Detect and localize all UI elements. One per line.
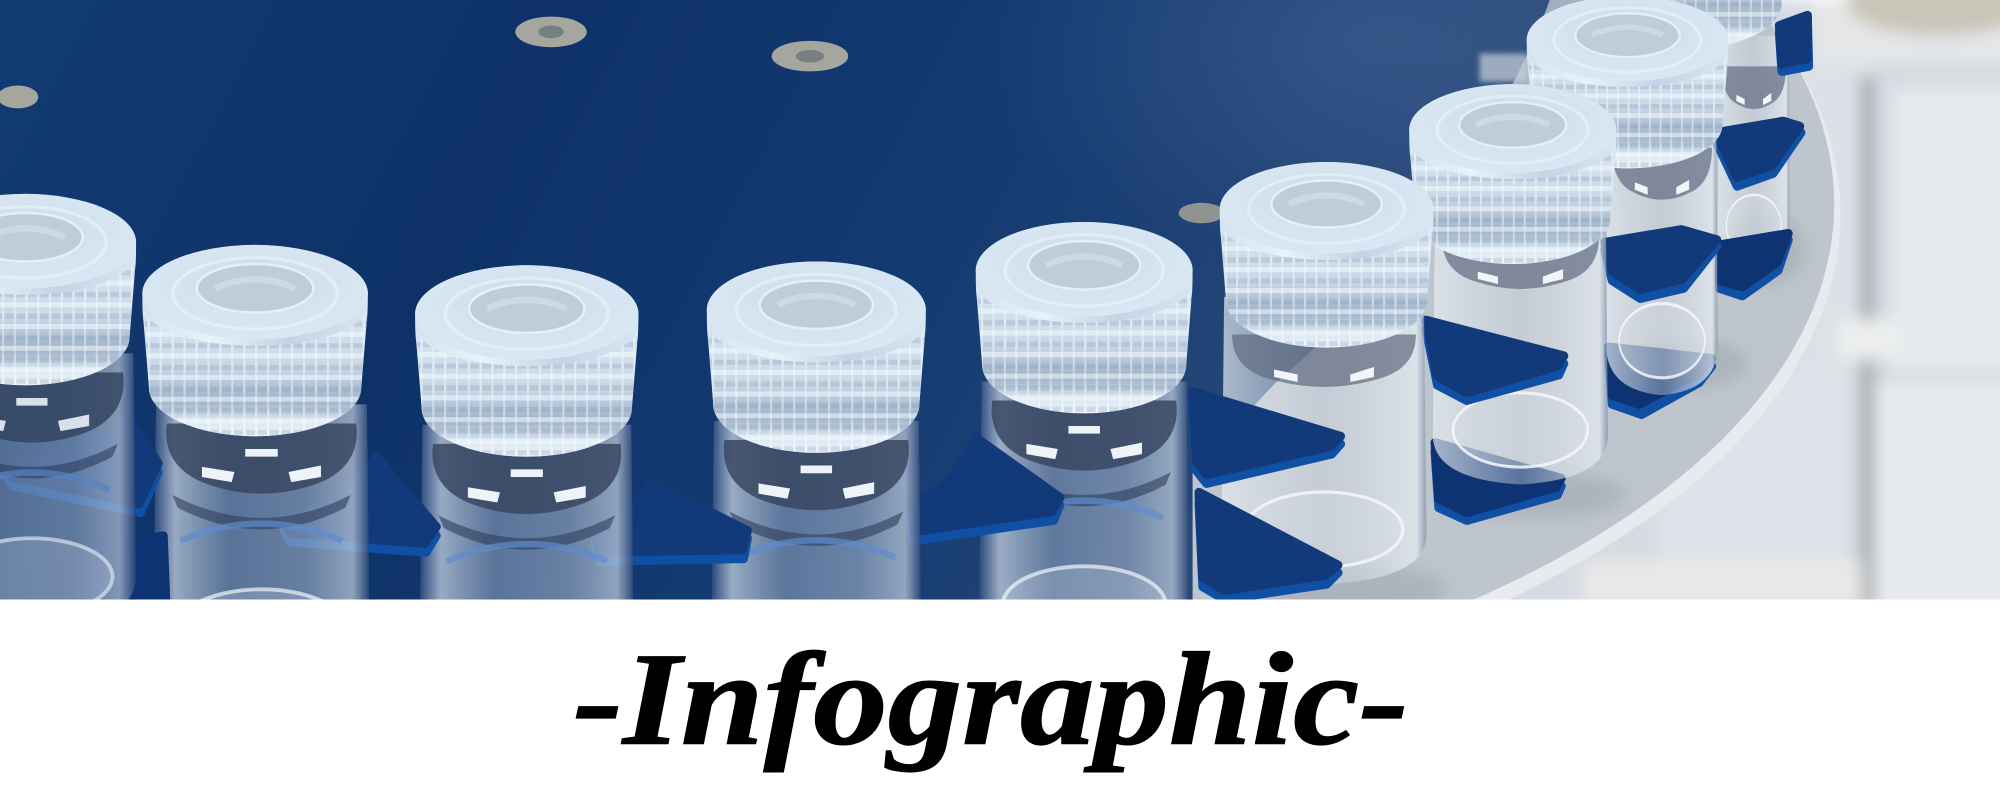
title: -Infographic- [573,626,1409,773]
soft highlight on plate [1102,0,1586,154]
tabs, lower centre right [1193,392,1341,599]
vial: right arc 6 [1409,84,1616,484]
tabs, right [1426,320,1564,401]
shadows on silver plate [1256,213,1805,615]
tabs, far left [8,418,166,602]
silver carousel plate [1192,0,1840,600]
blue top plate [0,0,1550,599]
vial: front 4 [976,222,1193,600]
vial: front 2 [415,265,638,600]
vial: back right 8 [1670,0,1790,240]
vial: right arc 5 [1220,162,1433,584]
screws [0,17,1224,223]
vial: far left [0,194,136,630]
tab between front vials 2 and 3 [594,482,747,561]
vial: front 1 [142,244,370,600]
tab between front vials 1 and 2 [283,457,436,552]
blurred cabinet background [1467,0,2000,612]
tabs, back right [1608,15,1809,415]
vial: right arc 7 [1527,0,1728,395]
vial: front 3 [706,262,926,600]
photo: vials on a carousel [0,0,2000,600]
tabs, middle right [1435,230,1717,520]
blurred plate lettering [1480,54,1528,82]
tab between front vials 3 and 4 [909,438,1060,541]
